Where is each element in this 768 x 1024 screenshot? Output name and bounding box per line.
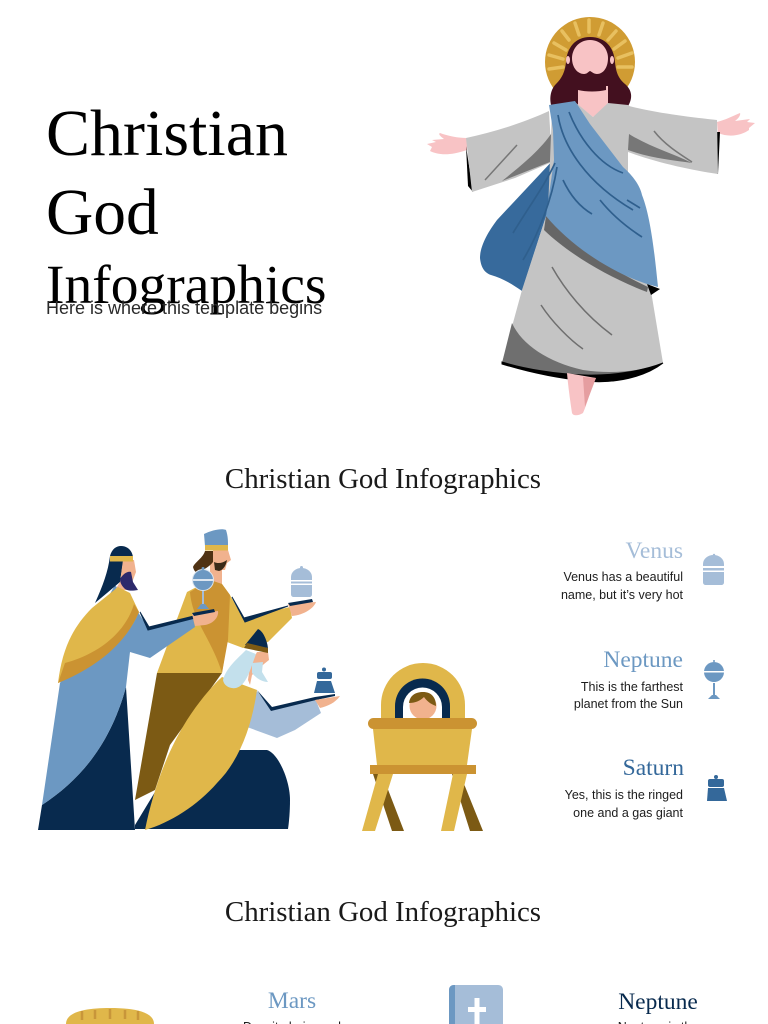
- item: Neptune: Neptune: [603, 647, 683, 673]
- goblet: [192, 567, 214, 609]
- item: Venus: Venus has a beautiful: [563, 570, 683, 584]
- man 3 navy base: [135, 750, 290, 829]
- left arm hand: [427, 133, 467, 154]
- torso and skirt: [502, 102, 663, 376]
- left sleeve: [466, 111, 552, 192]
- beard: [578, 72, 606, 92]
- man 1 cape: [58, 587, 139, 683]
- item: Venus: [561, 538, 724, 602]
- sash folds: [513, 112, 642, 260]
- title: God: [46, 177, 159, 249]
- illustration: Jesus figure: [427, 17, 755, 415]
- item: Mars: Mars: [268, 988, 316, 1014]
- illustration: manger with baby: [362, 663, 483, 831]
- man 3 hand: [315, 696, 340, 708]
- title: Infographics: [46, 255, 326, 316]
- item: Neptune lower: Neptune: [618, 989, 698, 1015]
- man 1 navy lower robe: [38, 687, 135, 830]
- hem: [502, 362, 663, 382]
- man 3 arm: [235, 691, 321, 750]
- navy arch: [395, 678, 450, 720]
- man 1 face: [115, 560, 136, 590]
- man 2 beard: [214, 560, 227, 571]
- heading: section 3: Christian God Infographics: [225, 896, 541, 928]
- item: Neptune: [574, 647, 724, 711]
- right arm hand: [717, 113, 755, 136]
- ear right: [610, 56, 614, 64]
- icon: halo: [545, 17, 635, 107]
- man 1 band: [110, 556, 133, 562]
- man 2 head: [213, 550, 231, 570]
- man 2 hat: [204, 529, 228, 546]
- item: Saturn: one and a gas giant: [573, 806, 684, 820]
- man 3 hair: [223, 650, 256, 688]
- ears: [566, 56, 570, 64]
- hair: [550, 37, 631, 108]
- heading: section 2: Christian God Infographics: [225, 463, 541, 495]
- icon: dark jar: [707, 775, 727, 801]
- man 2 robe: [157, 580, 292, 673]
- man 3 face: [248, 652, 269, 685]
- feet: [567, 373, 596, 415]
- right sleeve: [625, 105, 718, 174]
- manger box: [373, 729, 472, 765]
- item: Mars: [243, 988, 341, 1024]
- icon: goblet: [703, 660, 724, 699]
- man 1 hand: [192, 611, 218, 626]
- item: Saturn: [565, 755, 727, 820]
- baby face: [410, 692, 436, 720]
- man 3 beard: [252, 662, 268, 682]
- man 1 sleeve shadow: [140, 612, 195, 630]
- man 2 sleeve shadow: [232, 597, 288, 622]
- sleeve cuffs: [466, 146, 473, 192]
- title: Christian: [46, 97, 288, 170]
- manger halo: [381, 663, 465, 720]
- front sash: [546, 101, 658, 287]
- folds: [541, 267, 612, 349]
- man 2 trousers: [135, 673, 222, 800]
- face: [572, 40, 608, 74]
- sash shadow: [544, 216, 648, 292]
- manger rim: [368, 718, 477, 729]
- item: Neptune: planet from the Sun: [574, 697, 683, 711]
- back drape: [480, 158, 555, 291]
- item: Saturn: Saturn: [623, 755, 684, 781]
- icon: bread: [66, 1008, 154, 1024]
- man 1 beard: [120, 572, 138, 591]
- man 3 robe: [145, 677, 257, 830]
- item: Saturn: Yes, this is the ringed: [565, 788, 683, 802]
- title: [46, 97, 326, 316]
- man 2 neck: [210, 560, 222, 585]
- manger shelf: [370, 765, 476, 774]
- jar pale: [291, 566, 312, 597]
- skirt shadow: [502, 323, 663, 376]
- man 3 hat: [245, 629, 268, 648]
- icon: pale jar: [703, 554, 724, 585]
- icon: bible: [449, 985, 503, 1024]
- item: Venus: name, but it’s very hot: [561, 588, 684, 602]
- jar dark: [314, 668, 335, 693]
- illustration: three wise men: [38, 529, 340, 830]
- man 2 hand: [288, 602, 316, 616]
- subtitle: Here is where this template begins: [46, 298, 322, 318]
- neck: [578, 86, 608, 117]
- item: Venus: Venus: [626, 538, 683, 564]
- item: Neptune: This is the farthest: [581, 680, 684, 694]
- manger legs: [373, 774, 483, 831]
- man 2 hair: [193, 551, 215, 572]
- man 1 blue robe: [42, 585, 195, 805]
- man 1 hair: [95, 546, 133, 603]
